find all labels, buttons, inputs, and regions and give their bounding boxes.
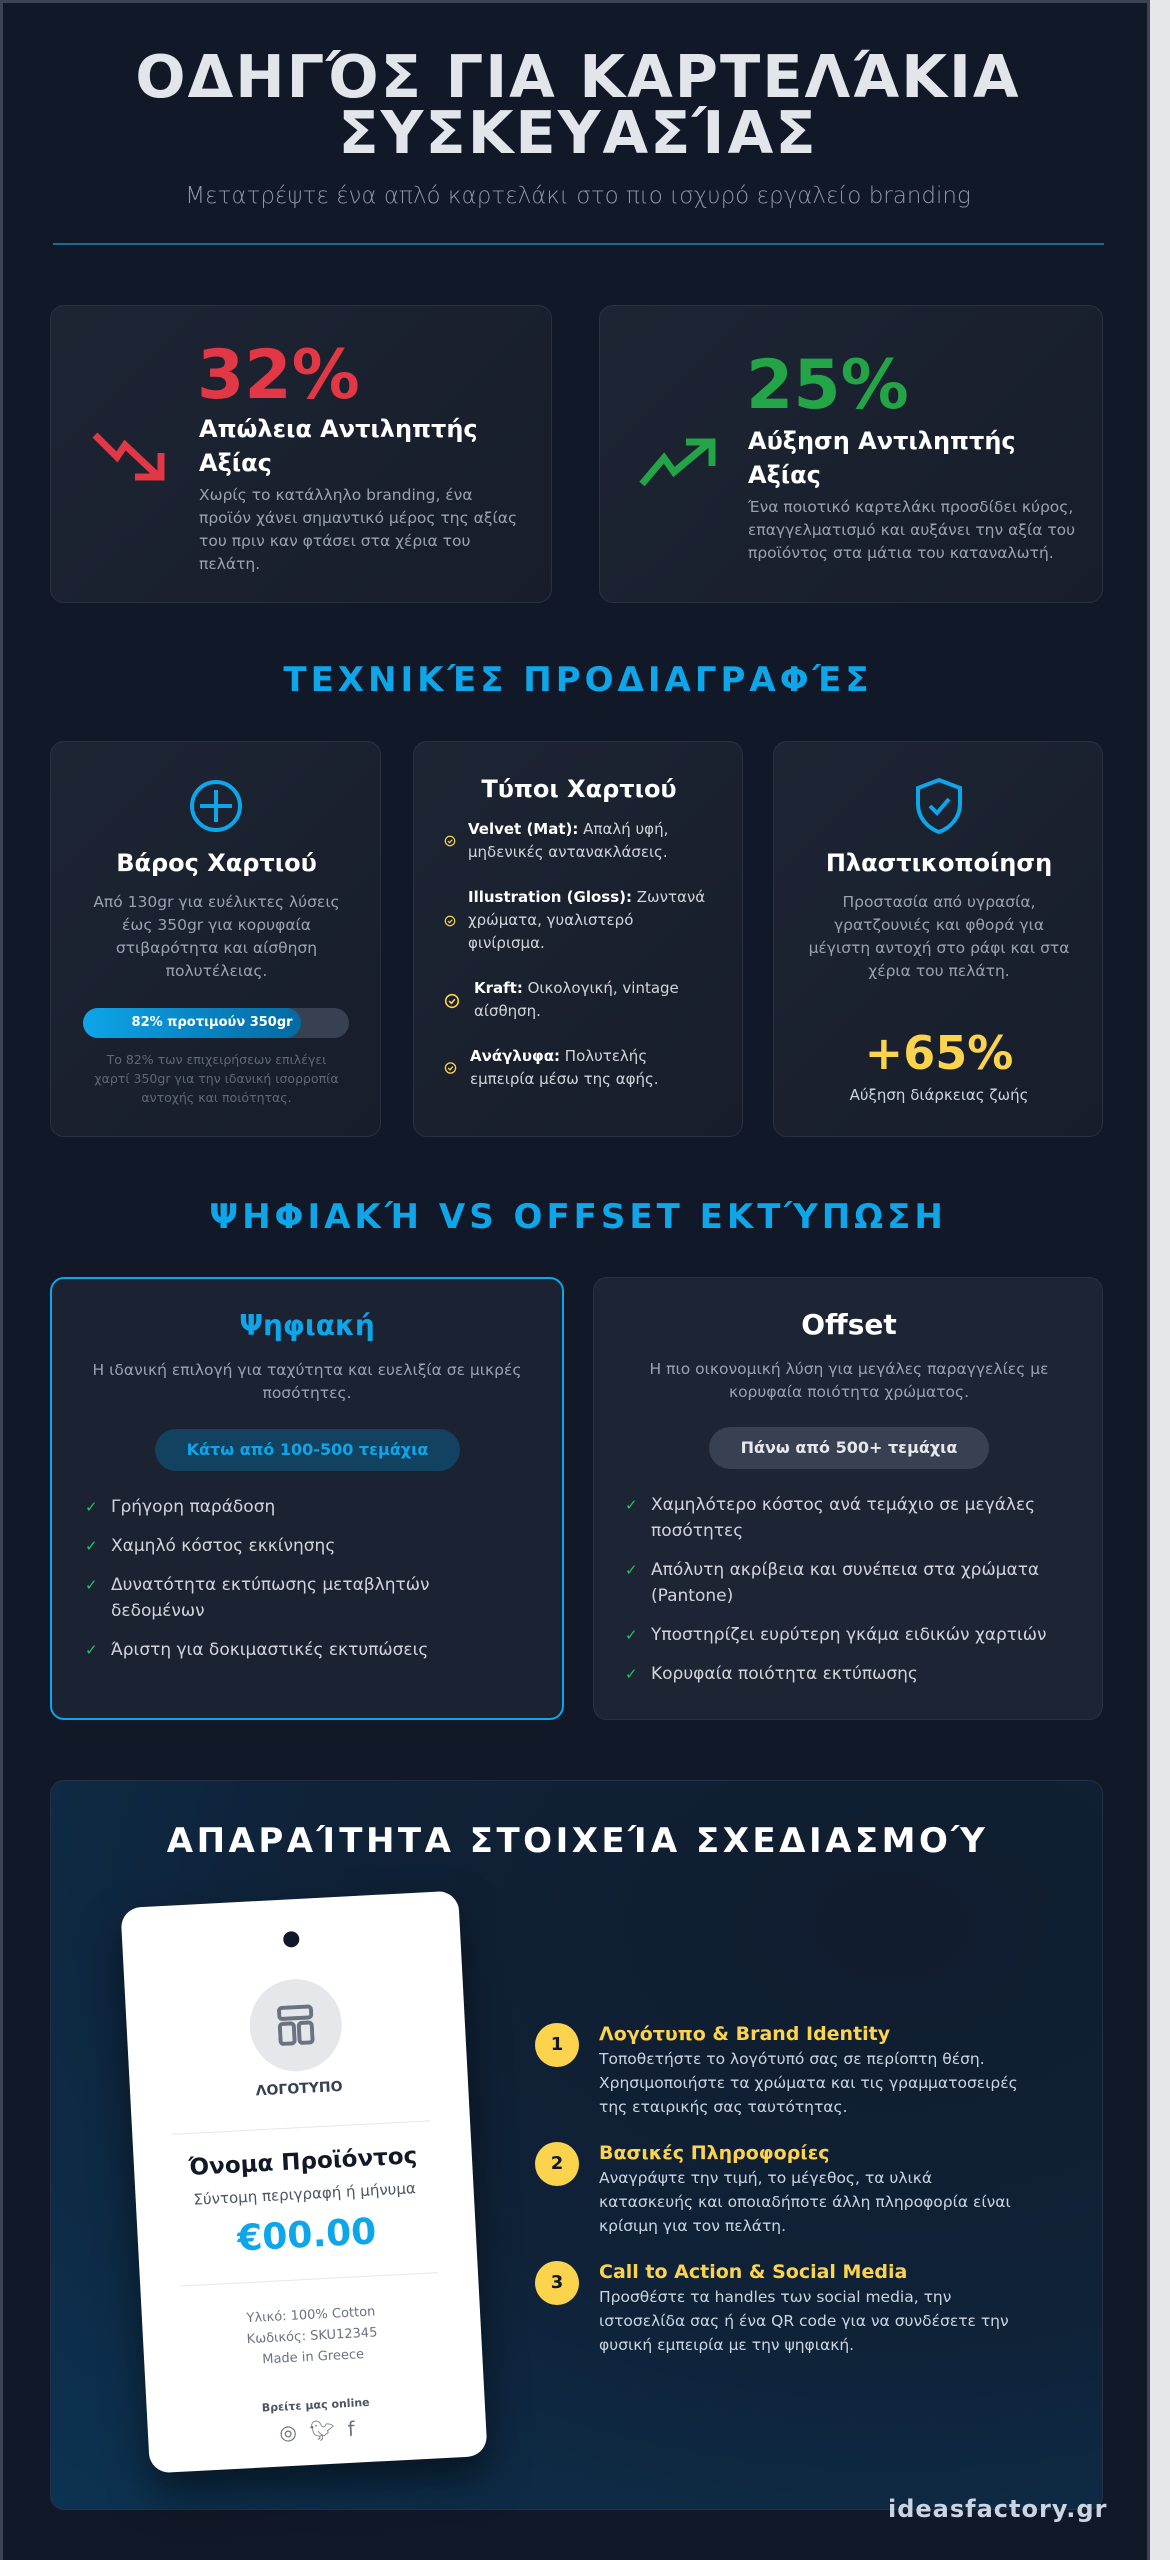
illustration: hang tag: Υλικό: 100% Cotton [246,2304,376,2326]
note: Το 82% των επιχειρήσεων επιλέγει χαρτί 350gr για την ιδανική ισορροπία αντοχής και ποιότητας. [94,1052,339,1105]
title: ΣΥΣΚΕΥΑΣΊΑΣ [338,98,818,167]
item 1: Τοποθετήστε το λογότυπό σας σε περίοπτη θέση. Χρησιμοποιήστε τα χρώματα και τις γραμματοσειρές της εταιρικής σας ταυτότητας. [599,2050,1018,2116]
progress bar: 82% προτιμούν 350gr [132,1015,293,1030]
icon: up trend [639,438,716,486]
panel: lamination [773,741,1103,1137]
item 3: Call to Action & Social Media [599,2261,907,2283]
caption: Αύξηση διάρκειας ζωής [850,1086,1028,1104]
pill: Κάτω από 100-500 τεμάχια [187,1440,428,1459]
pill: Πάνω από 500+ τεμάχια [741,1438,957,1457]
list: Άριστη για δοκιμαστικές εκτυπώσεις [111,1640,428,1660]
icon: shield [916,778,962,834]
text: gain description: Ένα ποιοτικό καρτελάκι προσδίδει κύρος, επαγγελματισμό και αυξάνει την αξία του προϊόντος στα μάτια του καταναλωτή. [748,498,1075,562]
list: Χαμηλό κόστος εκκίνησης [111,1536,335,1556]
item 2: Βασικές Πληροφορίες [599,2142,830,2164]
text: Από 130gr για ευέλικτες λύσεις έως 350gr για κορυφαία στιβαρότητα και αίσθηση πολυτέλειας. [93,893,340,980]
title [135,42,1021,167]
list: Κορυφαία ποιότητα εκτύπωσης [651,1664,918,1684]
heading: technical specs: ΤΕΧΝΙΚΈΣ ΠΡΟΔΙΑΓΡΑΦΈΣ [283,660,873,700]
item 1 [535,2023,1018,2116]
illustration: hang tag: ΛΟΓΟΤΥΠΟ [255,2079,343,2099]
panel: offset [593,1277,1103,1720]
item 2: Αναγράψτε την τιμή, το μέγεθος, τα υλικά κατασκευής και οποιαδήποτε άλλη πληροφορία είναι κρίσιμη για τον πελάτη. [599,2169,1011,2235]
illustration: hang tag: Made in Greece [262,2347,364,2367]
text: Προστασία από υγρασία, γρατζουνιές και φθορά για μέγιστη αντοχή στο ράφι και στα χέρια του πελάτη. [809,893,1069,980]
list: Απόλυτη ακρίβεια και συνέπεια στα χρώματα (Pantone) [651,1560,1039,1606]
illustration: hang tag: Όνομα Προϊόντος [188,2143,418,2181]
list: Χαμηλότερο κόστος ανά τεμάχιο σε μεγάλες ποσότητες [651,1495,1035,1541]
list [627,1495,1046,1684]
item 3 [535,2261,1009,2354]
panel: paper weight [50,741,381,1137]
panel: loss stat [50,305,552,603]
panel: design elements [50,1780,1103,2510]
item 3: 3 [551,2272,563,2293]
text: loss description [199,415,517,573]
heading: Ψηφιακή [239,1309,375,1342]
footer brand: ideasfactory.gr [888,2495,1107,2523]
progress bar [83,1008,349,1038]
heading: ΑΠΑΡΑΊΤΗΤΑ ΣΤΟΙΧΕΊΑ ΣΧΕΔΙΑΣΜΟΎ [167,1821,988,1861]
heading: Πλαστικοποίηση [826,849,1052,877]
heading: Offset [801,1308,897,1341]
illustration: hang tag: Σύντομη περιγραφή ή μήνυμα [193,2179,416,2209]
list: paper types: Illustration (Gloss): Ζωντανά χρώματα, γυαλιστερό φινίρισμα. [468,888,705,952]
list [87,1497,429,1660]
text: gain description [748,427,1075,562]
item 1: Λογότυπο & Brand Identity [599,2023,890,2045]
heading: Βάρος Χαρτιού [116,849,317,877]
text: Η ιδανική επιλογή για ταχύτητα και ευελιξία σε μικρές ποσότητες. [93,1361,521,1402]
pill [709,1427,989,1469]
subtitle: Μετατρέψτε ένα απλό καρτελάκι στο πιο ισχυρό εργαλείο branding [185,183,971,209]
stat: +65%: +65% [865,1026,1013,1080]
illustration: hang tag [120,1891,488,2473]
item 1: 1 [551,2034,563,2055]
text: gain description: Αύξηση Αντιληπτής Αξίας [748,427,1016,489]
item 2 [535,2142,1011,2235]
icon: down trend [92,432,164,480]
stat: 25%: 25% [746,346,909,425]
illustration: hang tag: €00.00 [236,2211,377,2260]
list: paper types: Velvet (Mat): Απαλή υφή, μηδενικές αντανακλάσεις. [468,820,668,861]
text: loss description: Απώλεια Αντιληπτής Αξίας [199,415,478,477]
text: loss description: Χωρίς το κατάλληλο branding, ένα προϊόν χάνει σημαντικό μέρος της αξίας του πριν καν φτάσει στα χέρια του πελάτη. [199,486,517,573]
item 2: 2 [551,2153,563,2174]
list: Υποστηρίζει ευρύτερη γκάμα ειδικών χαρτιών [651,1625,1046,1645]
list: Γρήγορη παράδοση [111,1497,275,1517]
panel: gain stat [599,305,1103,603]
heading: digital vs offset: ΨΗΦΙΑΚΉ VS OFFSET ΕΚΤΎΠΩΣΗ [209,1197,947,1237]
text: Η πιο οικονομική λύση για μεγάλες παραγγελίες με κορυφαία ποιότητα χρώματος. [650,1360,1048,1401]
title: ΟΔΗΓΌΣ ΓΙΑ ΚΑΡΤΕΛΆΚΙΑ [135,42,1021,111]
item 3: Προσθέστε τα handles των social media, την ιστοσελίδα σας ή ένα QR code για να συνδέσετε την φυσική εμπειρία με την ψηφιακή. [599,2288,1009,2354]
illustration: hang tag: Βρείτε μας online [261,2396,370,2415]
pill [155,1429,460,1471]
illustration: hang tag: ◎ 🐦︎ f [279,2417,355,2445]
illustration: hang tag: Κωδικός: SKU12345 [246,2325,378,2347]
icon: plus circle [190,780,242,832]
list: paper types: Ανάγλυφα: Πολυτελής εμπειρία μέσω της αφής. [470,1047,659,1088]
list: paper types [444,820,705,1088]
list: paper types: Kraft: Οικολογική, vintage αίσθηση. [474,979,679,1020]
stat: 32%: 32% [197,336,360,415]
panel: digital [50,1277,564,1720]
list: Δυνατότητα εκτύπωσης μεταβλητών δεδομένων [111,1575,429,1621]
panel: paper types [413,741,743,1137]
heading: Τύποι Χαρτιού [481,775,677,803]
